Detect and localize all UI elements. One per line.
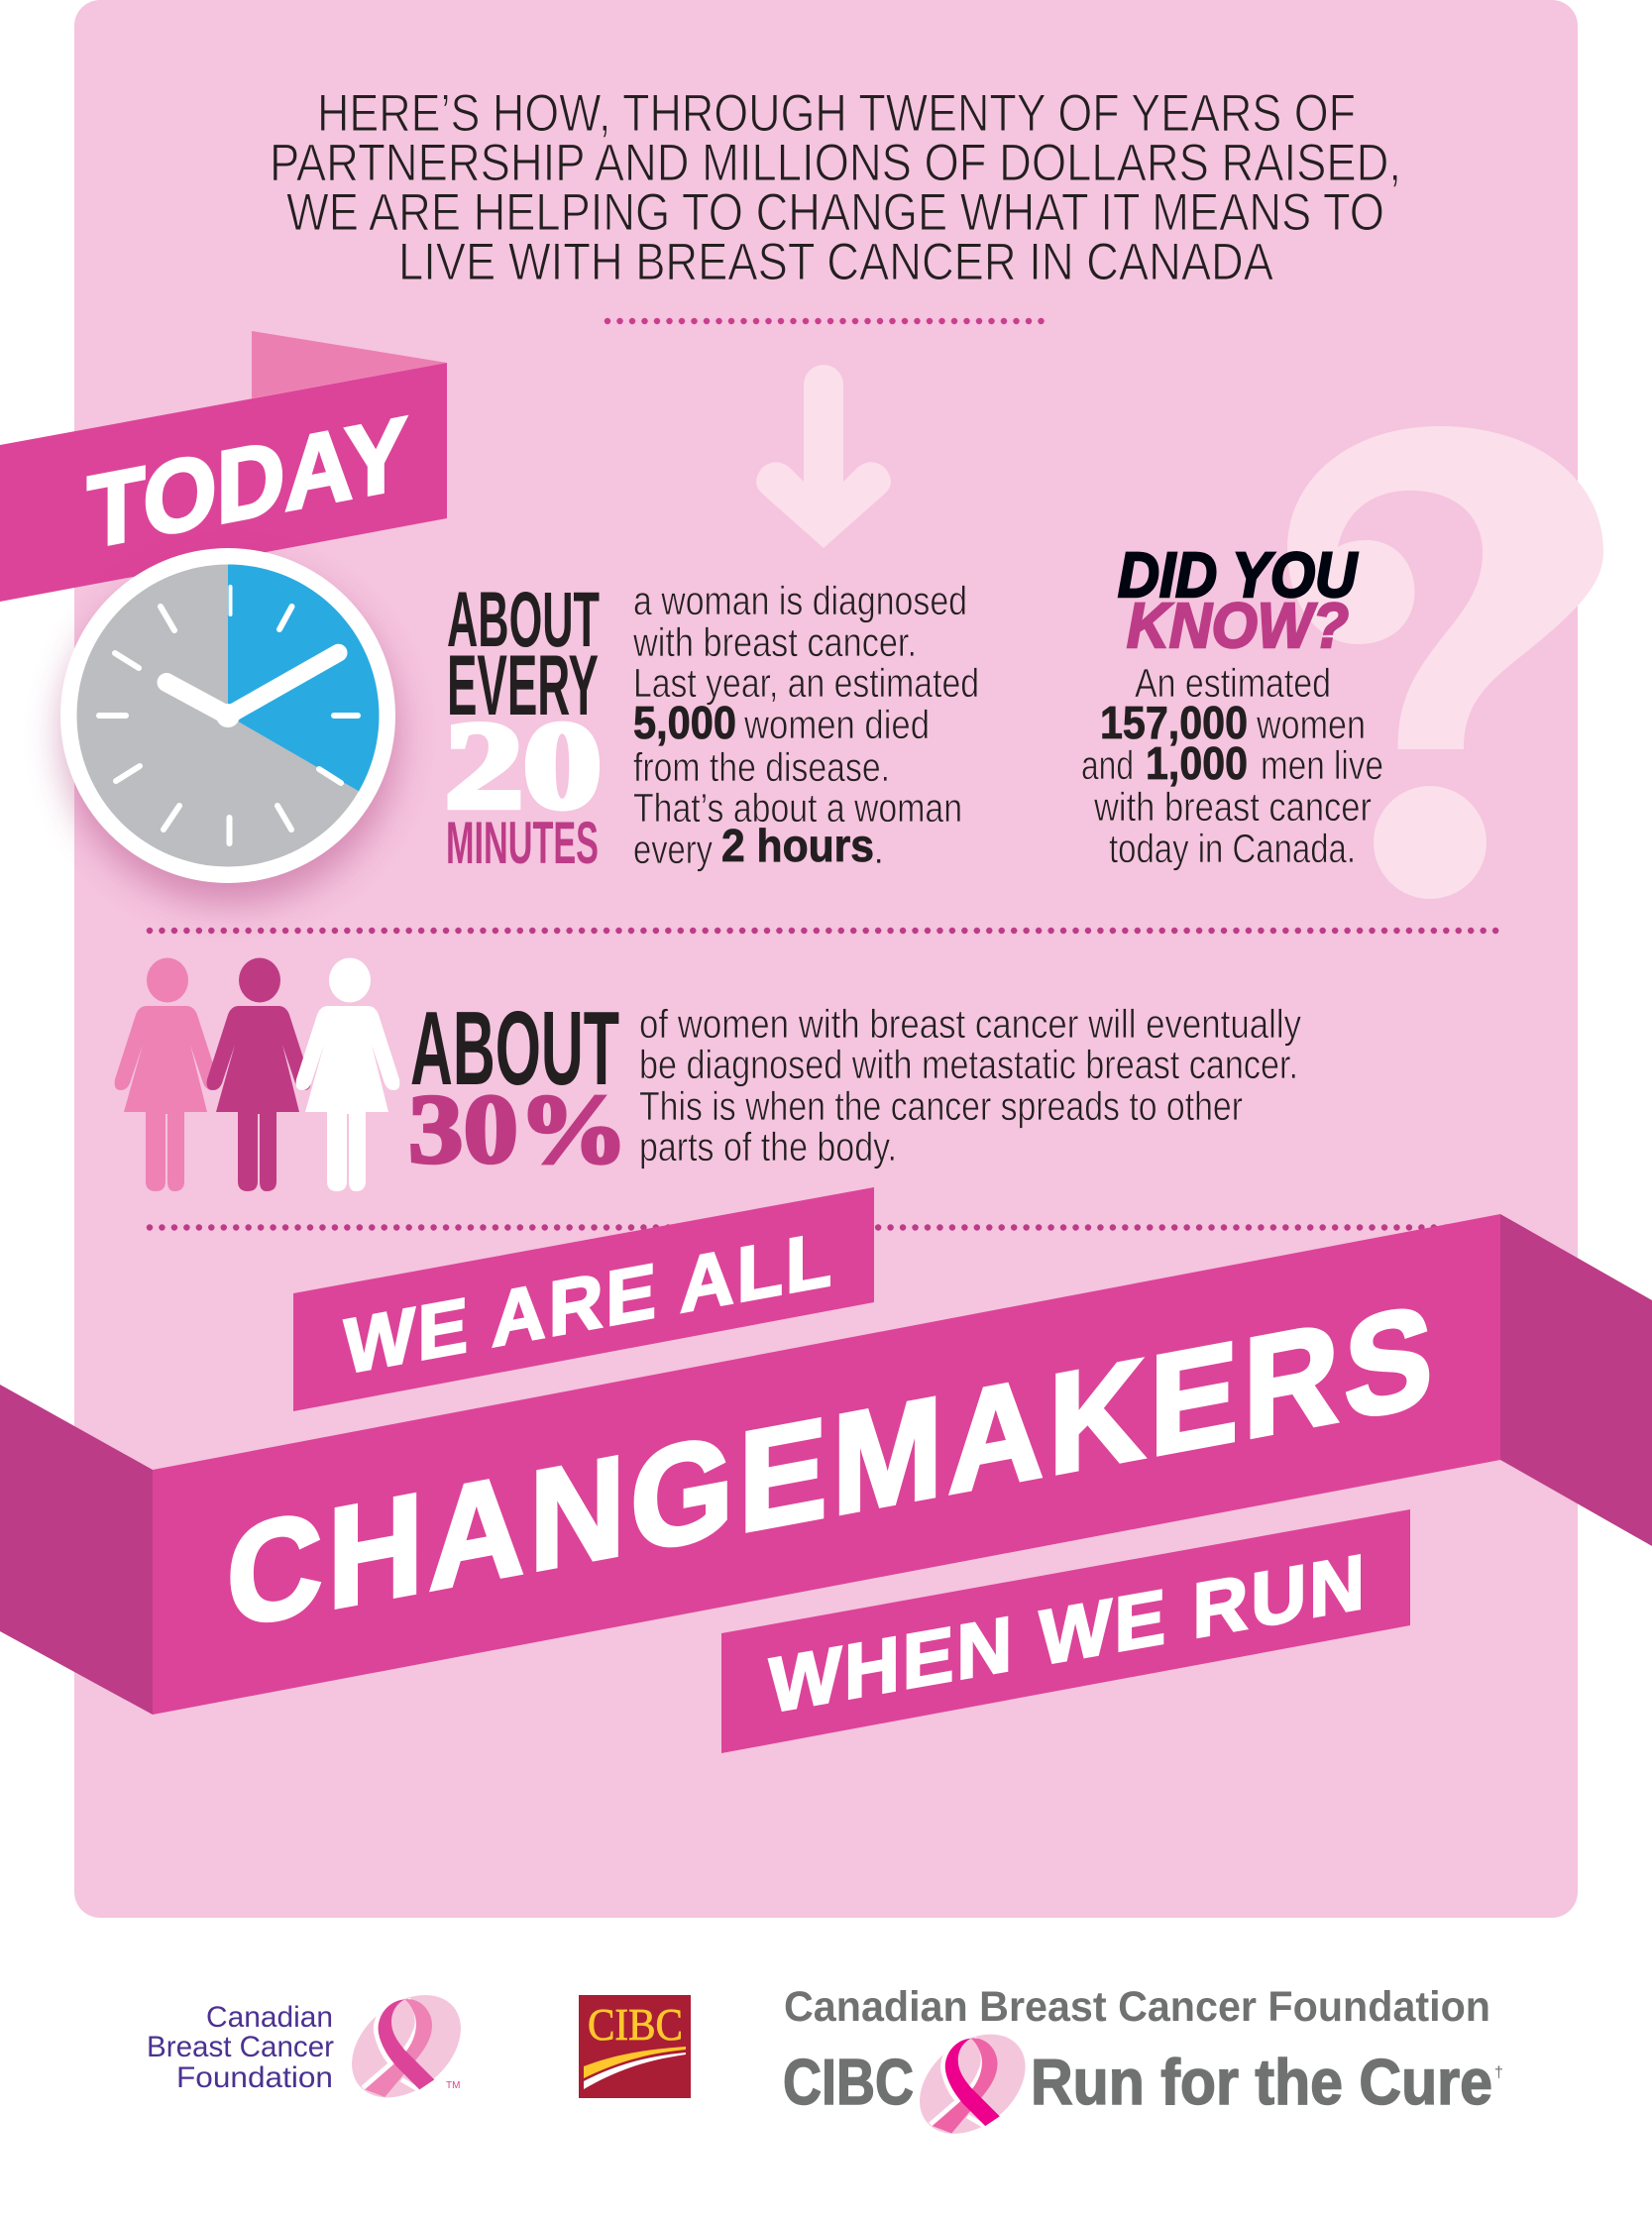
logo: Canadian Breast Cancer Foundation: Canadian [206,2001,333,2034]
icon: three women [115,957,399,1191]
callout: did you know: men live [1261,742,1383,788]
callout: did you know: today in Canada. [1109,826,1356,871]
logo: Canadian Breast Cancer Foundation: Breast Cancer [147,2031,334,2063]
heading: intro statement: LIVE WITH BREAST CANCER IN CANADA [398,233,1274,291]
banner: we are all: WE ARE ALL [344,1214,834,1390]
banner: changemakers [0,1214,1652,1715]
banner: when we run [721,1509,1410,1753]
callout: did you know: 157,000 [1100,697,1248,748]
callout: did you know: An estimated [1135,660,1331,706]
logo: CIBC Run for the Cure: Run for the Cure [1031,2046,1492,2118]
stat: about 30%: 30% [408,1074,628,1183]
logo: CIBC Run for the Cure: CIBC [783,2046,914,2118]
text block: diagnosis facts: 5,000 [633,697,736,748]
text block: diagnosis facts: with breast cancer. [632,619,917,665]
logo: CIBC: CIBC [588,1999,683,2050]
logo: CIBC Run for the Cure: † [1494,2064,1503,2081]
text block: diagnosis facts: every [633,827,713,872]
text block: diagnosis facts: women died [743,702,930,747]
text block: metastatic: be diagnosed with metastatic breast cancer. [639,1042,1298,1087]
banner: when we run: WHEN WE RUN [769,1537,1368,1729]
banner: today [0,331,447,602]
icon: large question mark [1287,426,1603,899]
callout: did you know: DID YOU [1118,539,1359,611]
stat: about every 20 minutes [445,575,602,876]
callout: did you know: KNOW? [1127,590,1349,661]
logo: CIBC Run for the Cure: Canadian Breast Cancer Foundation [784,1983,1490,2031]
logo: Canadian Breast Cancer Foundation [147,1974,481,2118]
stat: about every 20 minutes: EVERY [447,638,599,733]
callout: did you know: and [1081,742,1134,788]
banner: we are all [293,1187,874,1411]
text block: diagnosis facts [632,578,979,872]
stat: about every 20 minutes: 20 [445,698,602,834]
text block: diagnosis facts: 2 hours [721,820,874,871]
icon: clock [60,548,398,904]
text block: metastatic: of women with breast cancer will eventually [639,1001,1301,1047]
logo: CIBC [579,1995,691,2098]
text block: diagnosis facts: . [873,827,884,872]
text block: metastatic [639,1001,1301,1169]
text block: diagnosis facts: from the disease. [633,744,890,790]
logo: Canadian Breast Cancer Foundation: TM [446,2080,460,2091]
text block: diagnosis facts: a woman is diagnosed [633,578,967,623]
text block: metastatic: This is when the cancer spreads to other [639,1083,1243,1129]
stat: about every 20 minutes: MINUTES [446,810,599,876]
stat: about every 20 minutes: ABOUT [447,575,600,663]
stat: about 30%: ABOUT [410,990,619,1107]
logo: CIBC Run for the Cure [783,1983,1503,2154]
banner: today: TODAY [87,395,407,571]
callout: did you know [1081,539,1383,871]
panel: pink background [74,0,1578,1918]
heading: intro statement: PARTNERSHIP AND MILLIONS OF DOLLARS RAISED, [270,134,1401,192]
stat: about 30% [408,990,628,1183]
text block: metastatic: parts of the body. [639,1124,897,1169]
heading: intro statement [270,84,1401,291]
heading: intro statement: WE ARE HELPING TO CHANGE WHAT IT MEANS TO [286,183,1384,242]
heading: intro statement: HERE’S HOW, THROUGH TWENTY OF YEARS OF [317,84,1356,143]
callout: did you know: 1,000 [1146,737,1248,789]
callout: did you know: women [1256,702,1366,747]
arrow: down [756,365,891,548]
callout: did you know: with breast cancer [1093,784,1372,830]
logo: Canadian Breast Cancer Foundation: Foundation [176,2061,333,2094]
text block: diagnosis facts: Last year, an estimated [633,660,979,706]
banner: changemakers: CHANGEMAKERS [227,1274,1438,1658]
text block: diagnosis facts: That’s about a woman [633,785,962,831]
